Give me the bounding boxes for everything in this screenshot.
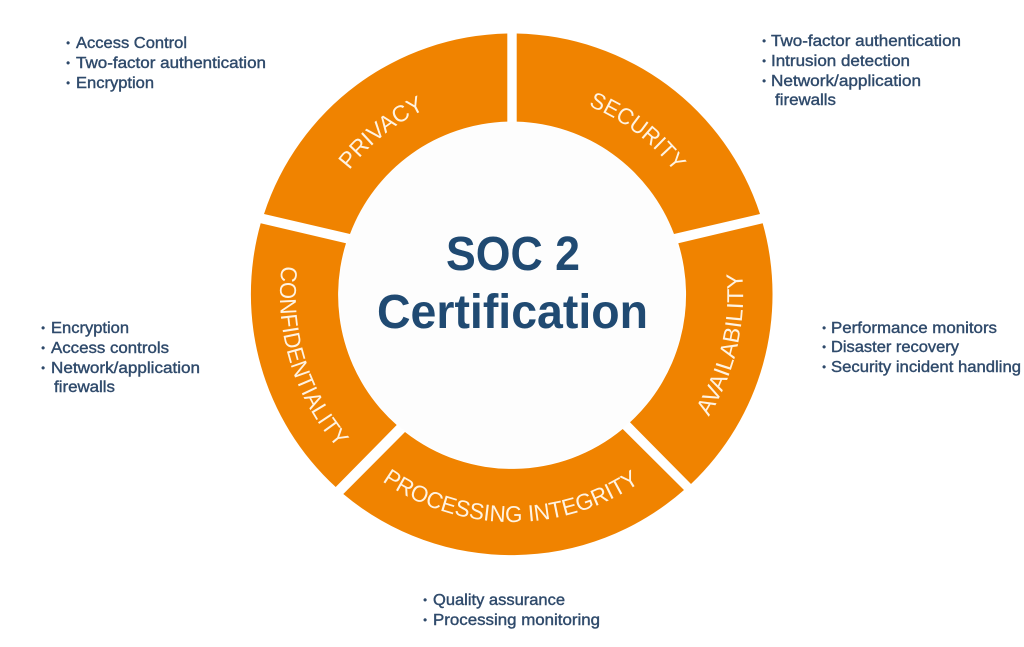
segment: availability: AVAILABILITY bbox=[698, 274, 744, 417]
list: availability bbox=[822, 320, 1021, 376]
list: privacy bbox=[66, 35, 266, 92]
list: security: • bbox=[762, 74, 766, 88]
list: security: Network/application bbox=[771, 73, 921, 90]
list: confidentiality: • bbox=[41, 321, 45, 335]
list: security: Two-factor authentication bbox=[771, 33, 961, 50]
list: privacy: • bbox=[66, 76, 70, 90]
segment: privacy bbox=[264, 34, 508, 234]
list: privacy: Access Control bbox=[76, 35, 187, 52]
segment: processing integrity: PROCESSING INTEGRITY bbox=[384, 469, 634, 522]
list: security: Intrusion detection bbox=[771, 53, 910, 70]
list: availability: Disaster recovery bbox=[831, 339, 959, 356]
list: processing integrity bbox=[423, 592, 600, 629]
title: Certification bbox=[377, 286, 648, 339]
list: privacy: Encryption bbox=[76, 75, 154, 92]
list: confidentiality: Encryption bbox=[51, 320, 129, 337]
list: security: firewalls bbox=[775, 92, 836, 109]
list: processing integrity: • bbox=[423, 613, 427, 627]
list: privacy: • bbox=[66, 56, 70, 70]
list: security: • bbox=[762, 54, 766, 68]
list: processing integrity: Quality assurance bbox=[433, 592, 565, 609]
list: availability: Performance monitors bbox=[831, 320, 997, 337]
list: confidentiality bbox=[41, 320, 200, 396]
segment: privacy: PRIVACY bbox=[338, 95, 420, 169]
center circle bbox=[339, 122, 685, 468]
list: processing integrity: Processing monitoring bbox=[433, 612, 600, 629]
list: availability: • bbox=[822, 360, 826, 374]
list: availability: • bbox=[822, 321, 826, 335]
list: security bbox=[762, 33, 961, 109]
segment: confidentiality: CONFIDENTIALITY bbox=[280, 268, 350, 444]
list: privacy: • bbox=[66, 36, 70, 50]
list: processing integrity: • bbox=[423, 593, 427, 607]
list: availability: • bbox=[822, 340, 826, 354]
list: confidentiality: • bbox=[41, 341, 45, 355]
list: confidentiality: • bbox=[41, 361, 45, 375]
segment: availability bbox=[630, 223, 772, 484]
list: confidentiality: firewalls bbox=[54, 379, 115, 396]
segment: security bbox=[516, 34, 760, 234]
list: availability: Security incident handling bbox=[831, 359, 1021, 376]
segment: processing integrity bbox=[343, 429, 684, 556]
list: confidentiality: Network/application bbox=[51, 360, 200, 377]
segment: security: SECURITY bbox=[590, 93, 687, 167]
list: privacy: Two-factor authentication bbox=[76, 55, 266, 72]
title: SOC 2 bbox=[446, 228, 580, 281]
list: security: • bbox=[762, 34, 766, 48]
list: confidentiality: Access controls bbox=[51, 340, 169, 357]
title bbox=[377, 228, 648, 339]
segment: confidentiality bbox=[250, 223, 397, 487]
